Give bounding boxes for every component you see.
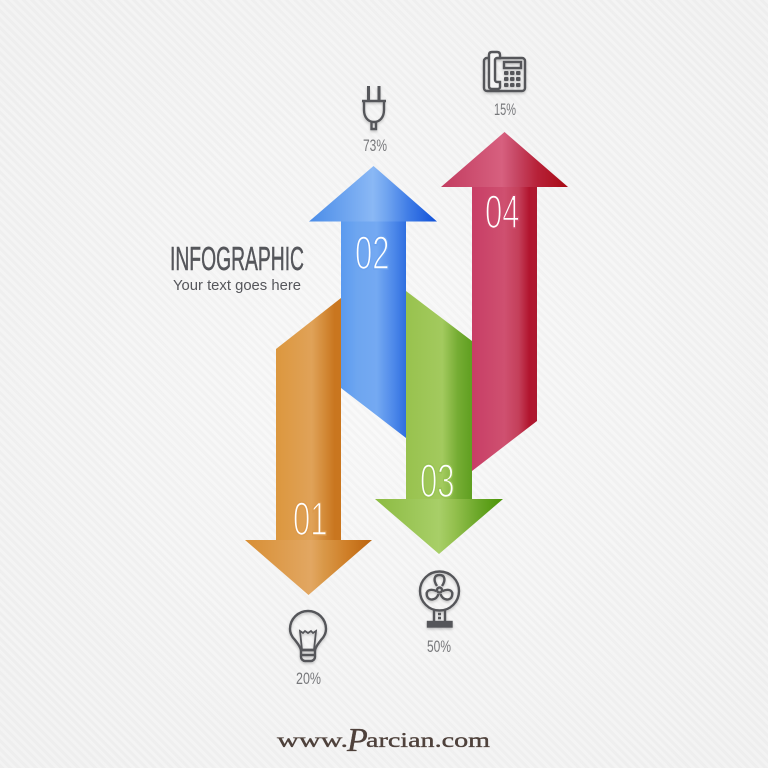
website footer: P	[346, 722, 368, 759]
number 03: 03	[420, 456, 454, 508]
label 15%: 15%	[494, 100, 516, 119]
arrow 03: green down arrow	[375, 291, 503, 554]
icon: light bulb	[290, 611, 326, 661]
icon: telephone	[484, 52, 525, 91]
arrow 04: red up arrow	[441, 132, 568, 471]
title block	[170, 240, 304, 294]
icon: desk fan	[420, 572, 459, 626]
label 50%: 50%	[427, 637, 451, 656]
label 73%: 73%	[363, 136, 387, 155]
number 02: 02	[355, 228, 389, 280]
number 04: 04	[485, 187, 519, 239]
website footer	[277, 722, 490, 759]
arrow 02: blue up arrow	[309, 166, 437, 438]
number 01: 01	[293, 494, 327, 546]
label 20%: 20%	[296, 669, 321, 688]
website footer: arcian.com	[366, 728, 490, 752]
heading: INFOGRAPHIC	[170, 240, 304, 277]
arrow 01: orange down arrow	[245, 298, 372, 595]
subtitle: Your text goes here	[173, 278, 301, 294]
website footer: www.	[277, 728, 348, 752]
icon: plug	[362, 86, 386, 129]
